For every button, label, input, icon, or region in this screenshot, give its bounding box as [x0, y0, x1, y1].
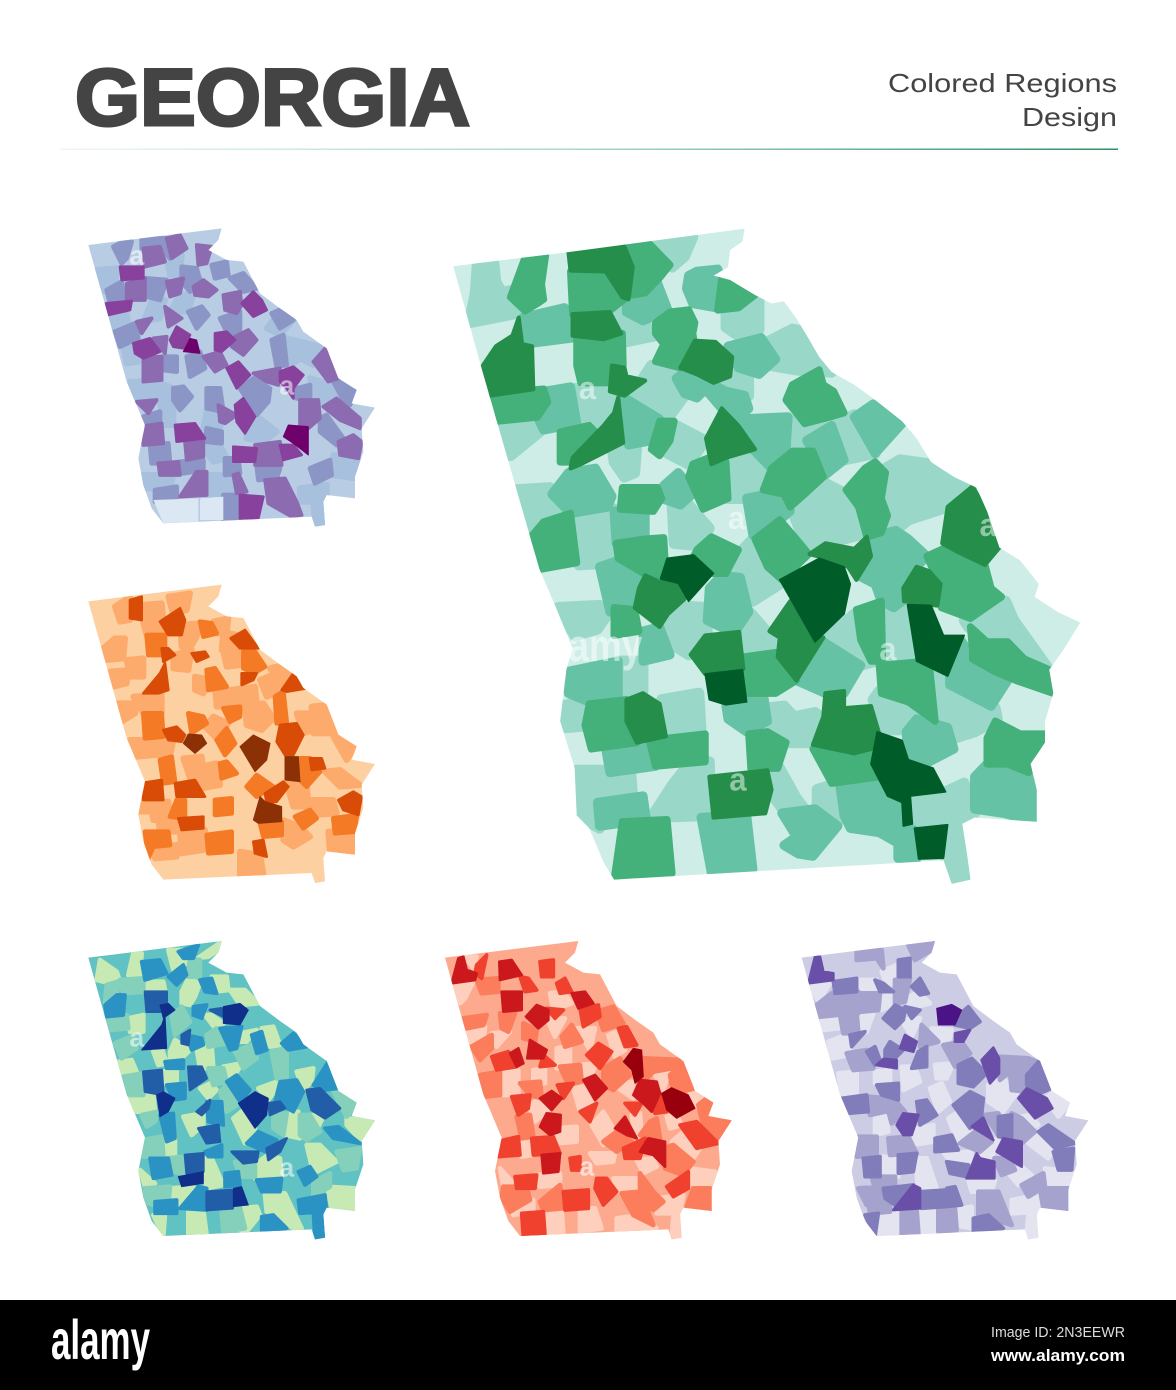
- base state shape: [88, 941, 375, 1239]
- watermark letters: a: [279, 370, 294, 400]
- base state shape: [88, 228, 375, 527]
- watermark letters: a: [980, 507, 997, 543]
- subtitle: Design: [1022, 102, 1117, 132]
- watermark letters: [129, 1023, 294, 1183]
- footer bar: [0, 1300, 1176, 1390]
- counties by colour class: [469, 237, 1053, 884]
- watermark letters: a: [129, 1023, 144, 1053]
- watermark letters: a: [279, 1153, 294, 1183]
- footer image id and url: www.alamy.com: [990, 1346, 1125, 1365]
- base state shape: [453, 229, 1080, 884]
- map: large green Georgia: [453, 229, 1080, 884]
- subtitle: Colored Regions: [888, 68, 1117, 98]
- map: violet Georgia: [802, 941, 1088, 1240]
- base state shape: [88, 585, 375, 883]
- counties by colour class: [103, 593, 362, 875]
- watermark letter: a: [579, 1152, 594, 1182]
- watermark letters: [568, 370, 997, 798]
- watermark letters: a: [129, 240, 144, 270]
- base state shape: [802, 941, 1088, 1239]
- map: purple Georgia: [88, 228, 375, 527]
- counties by colour class: [97, 235, 362, 527]
- footer image id and url: [990, 1324, 1125, 1365]
- watermark letters: [129, 240, 294, 400]
- map: blue-green Georgia: [88, 941, 375, 1240]
- footer image id and url: Image ID: 2N3EEWR: [991, 1324, 1125, 1341]
- watermark letters: a: [728, 500, 746, 536]
- footer logo: alamy: [51, 1308, 150, 1371]
- counties by colour class: [97, 942, 375, 1240]
- watermark letters: a: [729, 761, 747, 798]
- title: GEORGIA: [75, 53, 470, 143]
- map: orange Georgia: [88, 585, 375, 883]
- watermark letters: a: [879, 630, 897, 667]
- watermark letters: a: [579, 370, 597, 406]
- counties by colour class: [808, 942, 1075, 1240]
- base state shape: [445, 941, 732, 1239]
- watermark letters: amy: [568, 622, 643, 671]
- map: red Georgia: [445, 941, 732, 1240]
- subtitle: [888, 68, 1117, 132]
- counties by colour class: [452, 955, 732, 1240]
